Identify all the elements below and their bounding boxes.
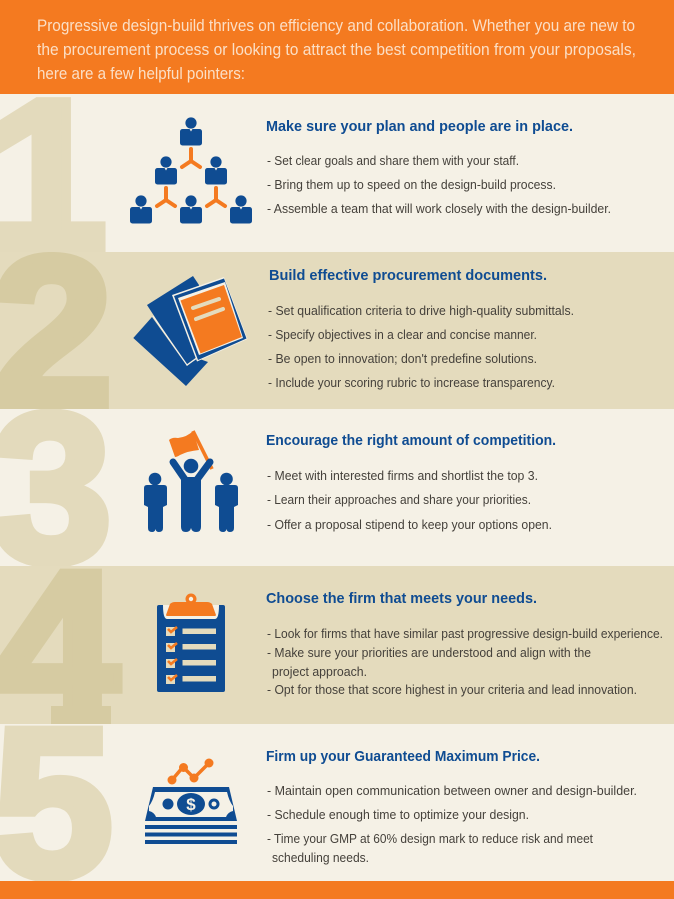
list 3: - Learn their approaches and share your priorities. [267, 493, 531, 507]
list 5: - Time your GMP at 60% design mark to reduce risk and meet [267, 832, 593, 846]
panel: step 2 [0, 252, 674, 409]
intro text: the procurement process or looking to attract the best competition from your proposals, [37, 41, 636, 59]
panel: step 3 [0, 409, 556, 566]
icon: team pyramid [130, 117, 252, 224]
list 2: - Be open to innovation; don't predefine solutions. [268, 352, 537, 366]
list 5: - Maintain open communication between owner and design-builder. [267, 784, 637, 798]
footer bar [0, 881, 674, 899]
list 3: - Meet with interested firms and shortlist the top 3. [267, 469, 538, 483]
list 5 [267, 784, 637, 865]
left person [144, 473, 167, 532]
list 1: - Assemble a team that will work closely with the design-builder. [267, 202, 611, 216]
list 4: project approach. [272, 665, 367, 679]
heading 4: Choose the firm that meets your needs. [266, 590, 537, 607]
icon: clipboard checklist [157, 594, 225, 692]
numeral 4 [0, 568, 122, 724]
list 2: - Set qualification criteria to drive high-quality submittals. [268, 304, 574, 318]
list 5: scheduling needs. [272, 851, 369, 865]
flag [169, 431, 212, 469]
heading 1: Make sure your plan and people are in place. [266, 118, 573, 135]
list 4: - Opt for those that score highest in your criteria and lead innovation. [267, 683, 637, 697]
heading 2: Build effective procurement documents. [269, 267, 547, 284]
icon: people with flag [144, 431, 238, 532]
panel: step 5 [0, 726, 636, 881]
header banner [0, 0, 674, 94]
trend line [168, 758, 214, 784]
list 1: - Bring them up to speed on the design-build process. [267, 178, 556, 192]
icon: documents [133, 276, 248, 386]
intro text: here are a few helpful pointers: [37, 65, 245, 83]
intro text [37, 17, 636, 83]
intro text: Progressive design-build thrives on efficiency and collaboration. Whether you are new to [37, 17, 635, 35]
icon: money stack [145, 758, 237, 844]
list 2: - Include your scoring rubric to increase transparency. [268, 376, 555, 390]
list 4: - Look for firms that have similar past progressive design-build experience. [267, 627, 663, 641]
list 4 [267, 627, 663, 697]
list 4: - Make sure your priorities are understood and align with the [267, 646, 591, 660]
list 3: - Offer a proposal stipend to keep your options open. [267, 518, 552, 532]
heading 3: Encourage the right amount of competition. [266, 432, 556, 449]
list 2: - Specify objectives in a clear and concise manner. [268, 328, 537, 342]
list 5: - Schedule enough time to optimize your design. [267, 808, 529, 822]
heading 5: Firm up your Guaranteed Maximum Price. [266, 748, 540, 765]
dollar sign: $ [186, 795, 196, 814]
list 1 [267, 154, 611, 216]
list 2 [268, 304, 574, 390]
centre person [173, 459, 210, 532]
panel: step 4 [0, 566, 674, 724]
panel: step 1 [0, 97, 610, 252]
list 3 [267, 469, 552, 532]
right person [215, 473, 238, 532]
list 1: - Set clear goals and share them with your staff. [267, 154, 519, 168]
